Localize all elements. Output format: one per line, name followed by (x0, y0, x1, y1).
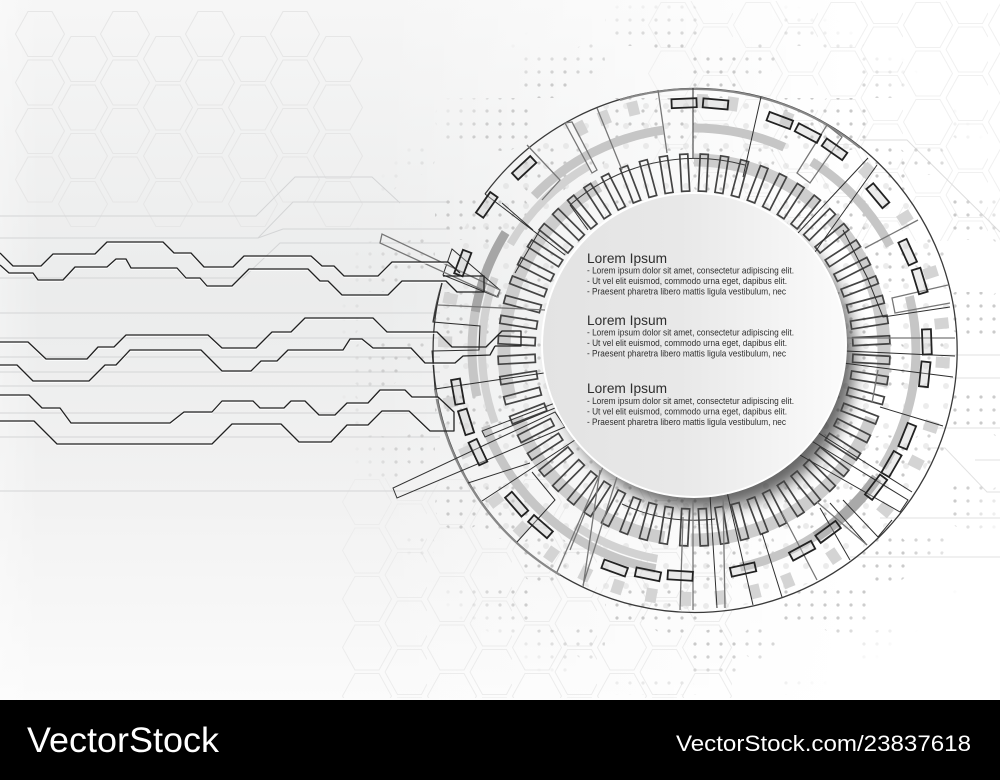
text block 3 (587, 380, 794, 428)
trace 4 (0, 339, 495, 381)
disc face (543, 194, 845, 496)
text block 2 (587, 312, 794, 360)
disc shadow (555, 209, 855, 509)
gray block markers (438, 94, 950, 606)
faint circuit guide lines (0, 140, 1000, 557)
trace 1 (0, 242, 460, 276)
text block 1: Lorem Ipsum (587, 250, 667, 266)
text block 3: Lorem Ipsum (587, 380, 667, 396)
text block 1: - Ut vel elit euismod, commodo urna eget, dapibus elit. (587, 276, 787, 287)
text block 3: - Praesent pharetra libero mattis ligula vestibulum, nec (587, 417, 786, 428)
gray ring bands (471, 127, 917, 573)
background hexagon pattern: upper left (16, 12, 362, 226)
radial bars (498, 154, 890, 546)
trace 2 (0, 259, 484, 295)
footer logo text: VectorStock (27, 721, 220, 760)
text block 1 (587, 250, 794, 298)
gray spoke lines (380, 90, 955, 610)
footer image id: VectorStock.com/23837618 (676, 731, 971, 756)
text block 1: - Praesent pharetra libero mattis ligula vestibulum, nec (587, 286, 786, 298)
outer ring outline (433, 88, 957, 612)
background hexagon pattern: bottom (342, 478, 732, 698)
halftone dot field (334, 0, 1000, 695)
center disc (541, 192, 847, 498)
text block 2: - Lorem ipsum dolor sit amet, consectetur adipiscing elit. (587, 328, 794, 338)
circuit ring (380, 85, 960, 615)
circuit traces (0, 242, 521, 445)
trace 3 (0, 318, 521, 359)
outer tangent rectangles (451, 98, 932, 581)
trace highlights (0, 243, 455, 445)
text block 3: - Lorem ipsum dolor sit amet, consectetur adipiscing elit. (587, 396, 794, 407)
text block 2: - Praesent pharetra libero mattis ligula vestibulum, nec (587, 348, 786, 360)
text block 2: - Ut vel elit euismod, commodo urna eget, dapibus elit. (587, 338, 787, 349)
text block 1: - Lorem ipsum dolor sit amet, consectetur adipiscing elit. (587, 266, 794, 276)
text block 3: - Ut vel elit euismod, commodo urna eget, dapibus elit. (587, 406, 787, 418)
spoke lines and segments (393, 88, 955, 608)
text block 2: Lorem Ipsum (587, 312, 667, 328)
background hexagon pattern: upper right (648, 1, 1000, 241)
ring inner dots (430, 85, 960, 615)
trace 5 loop (0, 390, 454, 444)
footer bar (0, 700, 1000, 780)
disc edge highlight (541, 192, 847, 498)
